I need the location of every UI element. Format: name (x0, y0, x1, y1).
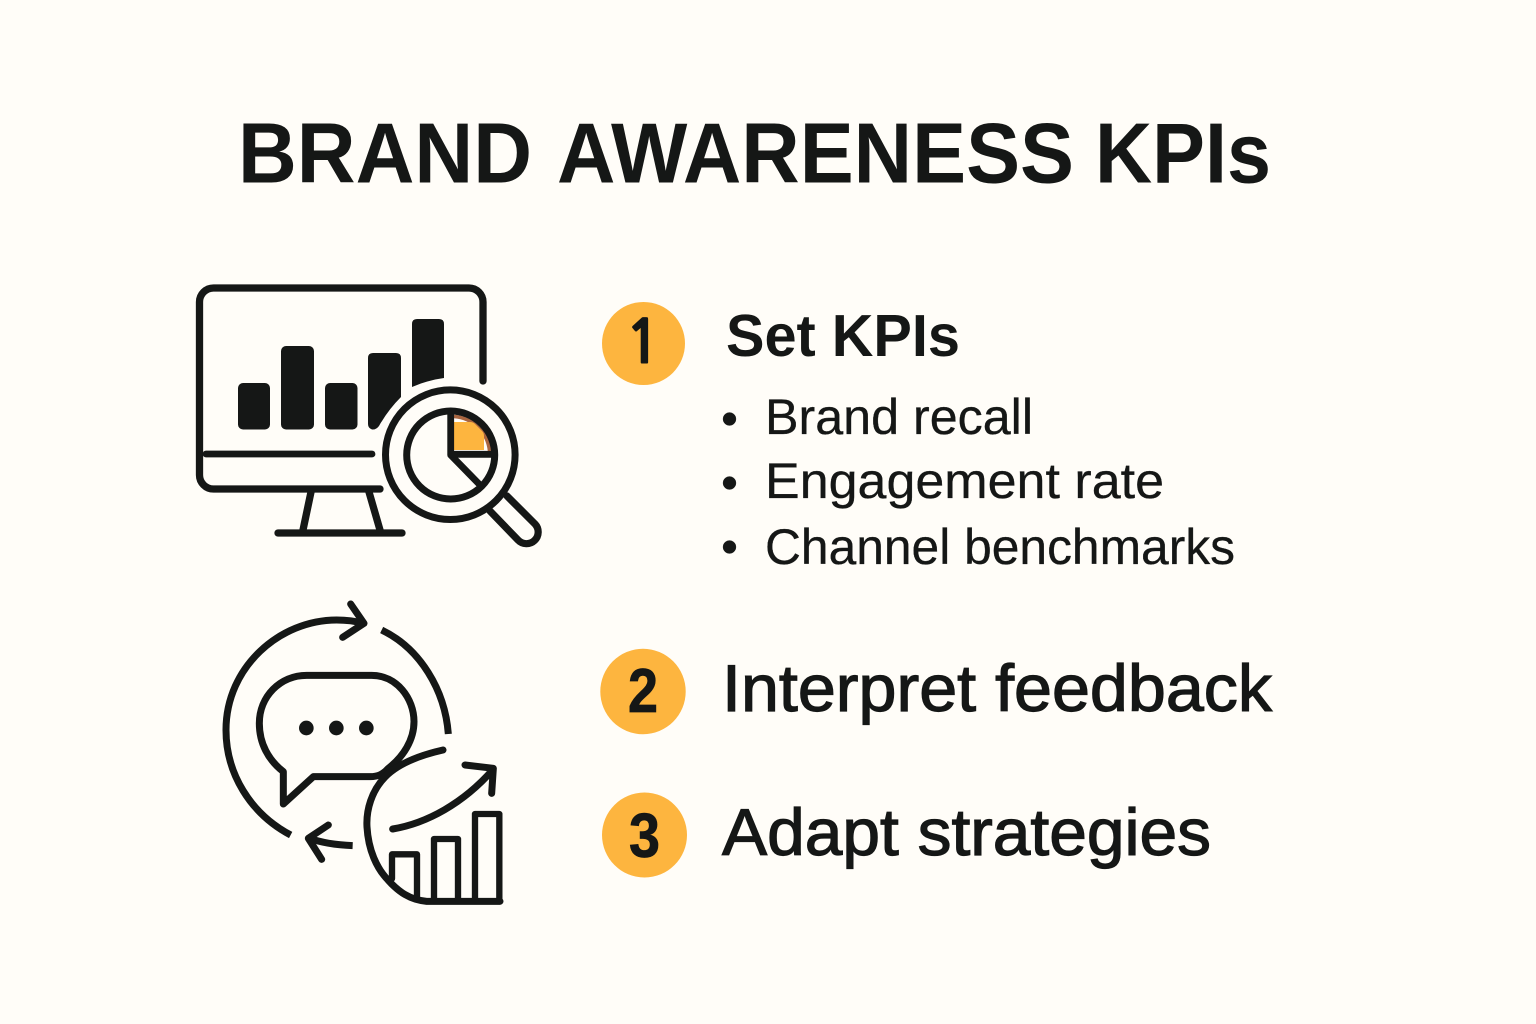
cycle arc right (382, 630, 448, 734)
large circle arc (367, 750, 500, 901)
step 2 badge (600, 649, 686, 734)
pie chart (407, 411, 495, 499)
screen baseline (206, 451, 372, 457)
cycle arrow top (226, 620, 363, 835)
growth bars (392, 814, 499, 901)
step 3 heading: Adapt strategies (722, 795, 1211, 869)
icon: feedback cycle with growth chart (226, 604, 500, 901)
step 3 badge (602, 792, 687, 878)
title (238, 106, 1271, 202)
title: KPIs (1095, 106, 1271, 202)
step 1 bullet list (723, 389, 1235, 575)
magnifier lens (386, 390, 515, 520)
magnifier handle (490, 496, 538, 544)
step 1 badge (602, 302, 685, 385)
step 1 bullet list: Engagement rate (765, 453, 1164, 509)
step 1 bullet list: Brand recall (765, 389, 1033, 445)
step 1 badge: 1 (625, 313, 661, 372)
title: AWARENESS (557, 106, 1074, 202)
monitor stand (278, 492, 402, 533)
step 3 badge: 3 (629, 802, 660, 871)
bars (238, 319, 444, 430)
icon: monitor with bar chart and magnifier (200, 288, 538, 544)
speech dots (299, 721, 374, 735)
speech bubble (259, 675, 414, 804)
return arrow (309, 838, 353, 846)
growth arrow (393, 765, 493, 829)
title: BRAND (238, 106, 532, 202)
step 2 heading: Interpret feedback (722, 651, 1273, 725)
monitor frame (200, 288, 483, 489)
step 2 badge: 2 (628, 657, 658, 726)
step 1 bullet list: Channel benchmarks (765, 519, 1235, 575)
step 1 heading: Set KPIs (726, 303, 960, 369)
